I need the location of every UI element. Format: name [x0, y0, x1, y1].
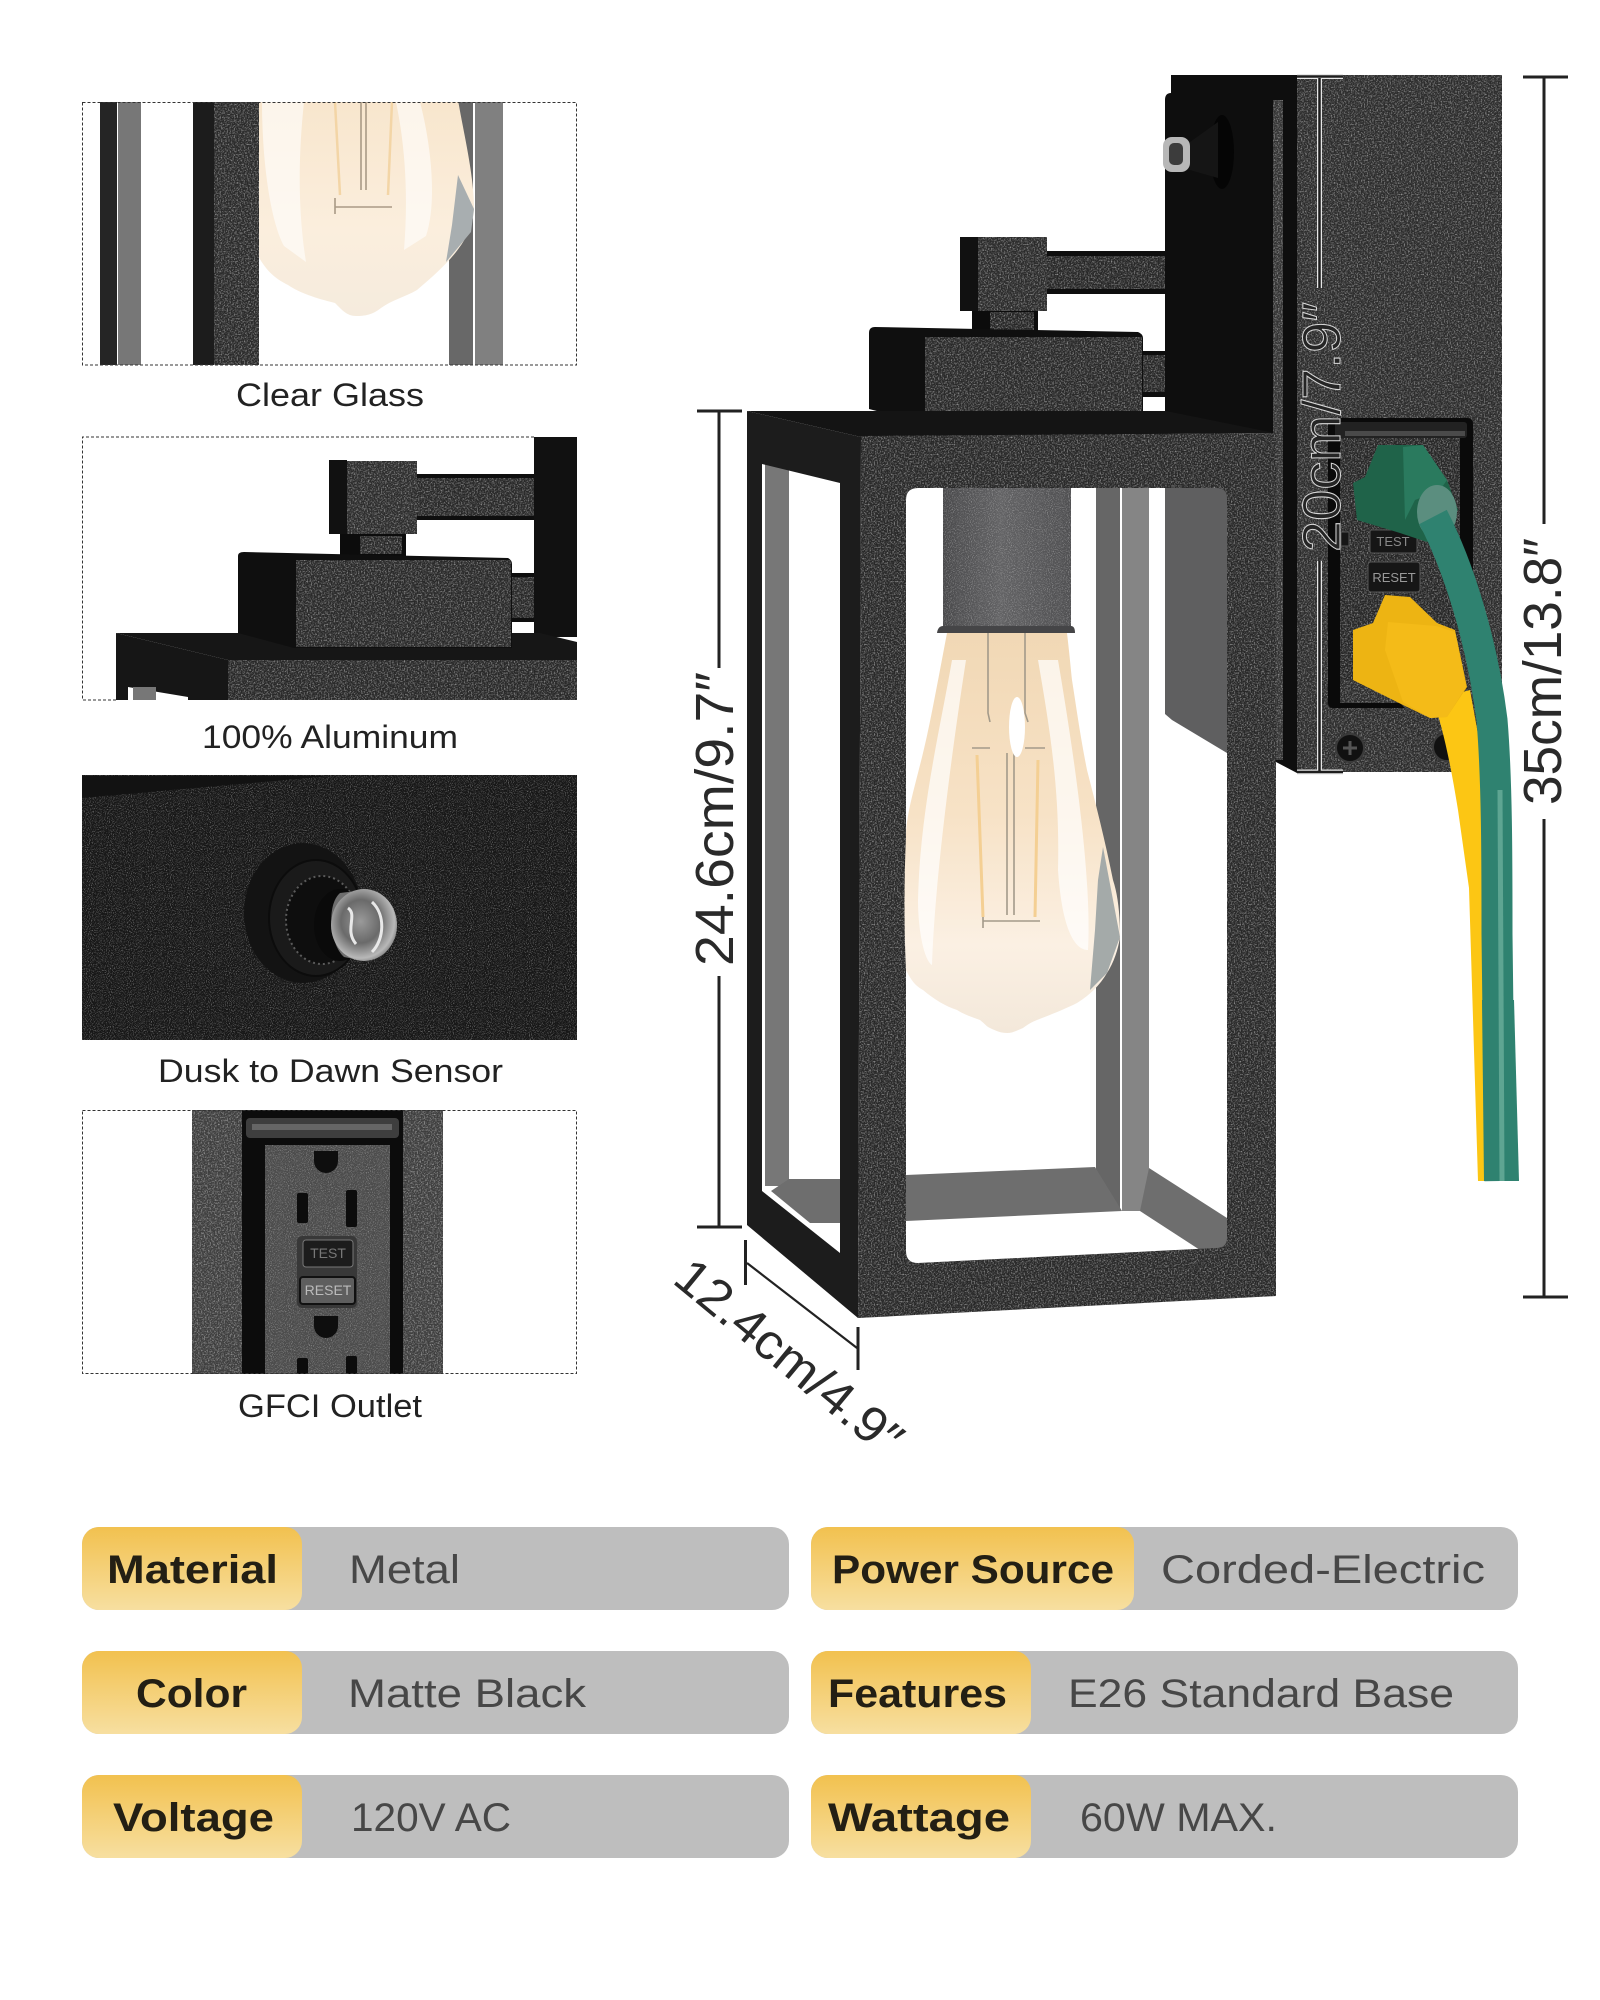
caption: clear glass: Clear Glass [236, 377, 424, 413]
GFCI outlet opening: RESET [1372, 570, 1416, 585]
dimension: plate height 20cm: 20cm/7.9″ [1292, 302, 1352, 552]
spec row: material: Metal [349, 1548, 460, 1592]
panel: dusk to dawn sensor detail [82, 775, 577, 1040]
dimension: plate height 20cm [1292, 76, 1352, 772]
panel: aluminum detail [82, 437, 577, 702]
lamp: wall sconce illustration [747, 75, 1519, 1318]
spec row: power source [811, 1527, 1518, 1610]
spec row: features [811, 1651, 1518, 1734]
lantern back posts and glass [765, 464, 1227, 1250]
spec row: material: Material [107, 1548, 278, 1592]
lamp socket [937, 488, 1075, 633]
wall plate side view [1165, 75, 1297, 773]
yellow cord and plug [1353, 595, 1495, 1181]
spec row: features: E26 Standard Base [1068, 1672, 1454, 1716]
dimension: overall height 35cm [1513, 77, 1573, 1297]
dimension: lantern depth 12.4cm: 12.4cm/4.9″ [664, 1247, 914, 1467]
panel: GFCI outlet detail [82, 1110, 576, 1378]
spec row: color: Matte Black [348, 1672, 587, 1716]
dimension: overall height 35cm: 35cm/13.8″ [1513, 538, 1573, 805]
lantern side frame [747, 411, 861, 1318]
spec row: material [82, 1527, 789, 1610]
spec row: wattage [811, 1775, 1518, 1858]
caption: aluminum: 100% Aluminum [202, 719, 458, 755]
spec row: wattage: 60W MAX. [1080, 1796, 1277, 1840]
spec row: power source: Power Source [832, 1548, 1114, 1592]
caption: GFCI outlet: GFCI Outlet [238, 1388, 422, 1424]
canopy block [869, 327, 1143, 423]
caption: sensor: Dusk to Dawn Sensor [158, 1053, 503, 1089]
spec row: wattage: Wattage [828, 1796, 1010, 1840]
panel: clear glass detail [82, 100, 576, 365]
dimension: lantern height 24.6cm [685, 411, 745, 1227]
sensor gasket and lens [244, 843, 397, 983]
spec row: color: Color [136, 1672, 247, 1716]
lantern front frame [858, 433, 1276, 1318]
lantern top plate [747, 411, 1275, 437]
dimension: lantern height 24.6cm: 24.6cm/9.7″ [685, 672, 745, 966]
panel: GFCI outlet detail: RESET [305, 1282, 352, 1298]
GFCI outlet opening: TEST [1376, 534, 1410, 549]
spec row: voltage: Voltage [113, 1796, 274, 1840]
GFCI outlet opening [1328, 418, 1473, 762]
spec row: features: Features [828, 1672, 1007, 1716]
mounting arm and cube [960, 237, 1165, 397]
spec row: power source: Corded-Electric [1161, 1548, 1485, 1592]
spec row: color [82, 1651, 789, 1734]
sensor on side plate [1163, 115, 1234, 189]
spec row: voltage: 120V AC [351, 1796, 511, 1840]
green cord and plug [1353, 445, 1519, 1181]
wall plate front with outlet face [1297, 75, 1502, 772]
panel: GFCI outlet detail: TEST [310, 1245, 346, 1261]
spec row: voltage [82, 1775, 789, 1858]
bulb [904, 633, 1120, 1033]
